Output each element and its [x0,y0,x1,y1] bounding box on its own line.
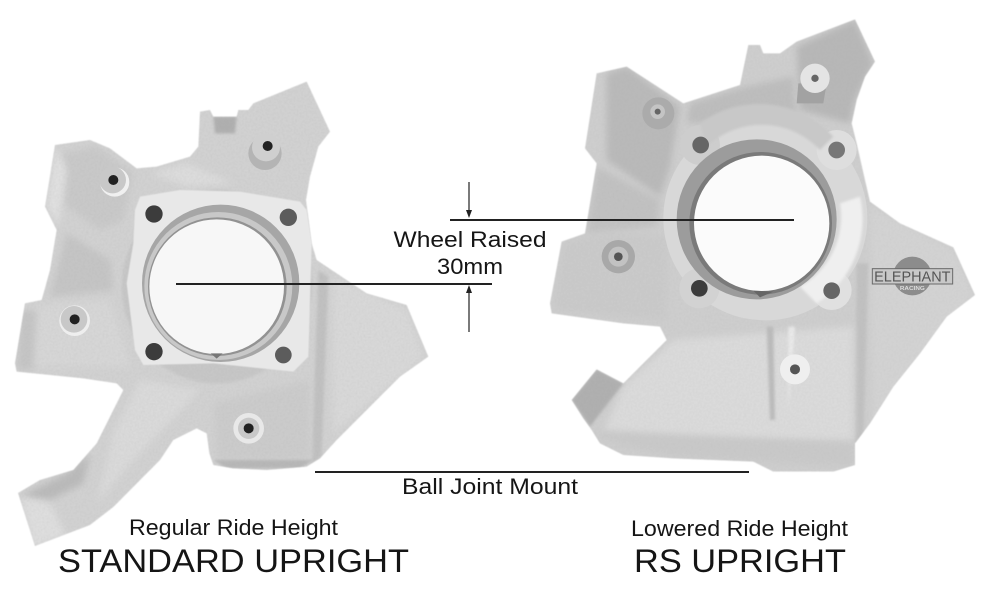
bearing bore: RS [677,139,837,299]
RS upright casting [550,19,976,472]
logo: Elephant Racing: ELEPHANT [874,269,951,285]
center line: RS upright [450,219,794,221]
ball joint line [315,471,749,473]
flange bolt holes: standard [145,205,297,363]
mounting bosses: standard [59,133,282,444]
label: wheel raised: Wheel Raised [394,227,546,252]
bearing bore: standard [142,205,299,362]
heading: standard upright: STANDARD UPRIGHT [58,543,409,579]
label: 30mm: 30mm [437,254,503,279]
caption: regular ride height: Regular Ride Height [129,515,338,540]
logo: Elephant Racing [872,257,953,295]
flange bolt holes: RS [691,137,845,299]
arrow: down to RS center line [466,182,472,218]
flange: RS [663,104,867,320]
mounting bosses: RS [602,64,830,384]
heading: RS upright: RS UPRIGHT [634,543,846,579]
caption: lowered ride height: Lowered Ride Height [631,516,848,541]
center line: standard upright [176,283,492,285]
arrow: up to standard center line [466,285,472,332]
label: ball joint mount: Ball Joint Mount [402,474,578,499]
logo: Elephant Racing: RACING [900,286,925,292]
flange: standard [127,190,312,372]
standard upright casting [14,82,428,546]
